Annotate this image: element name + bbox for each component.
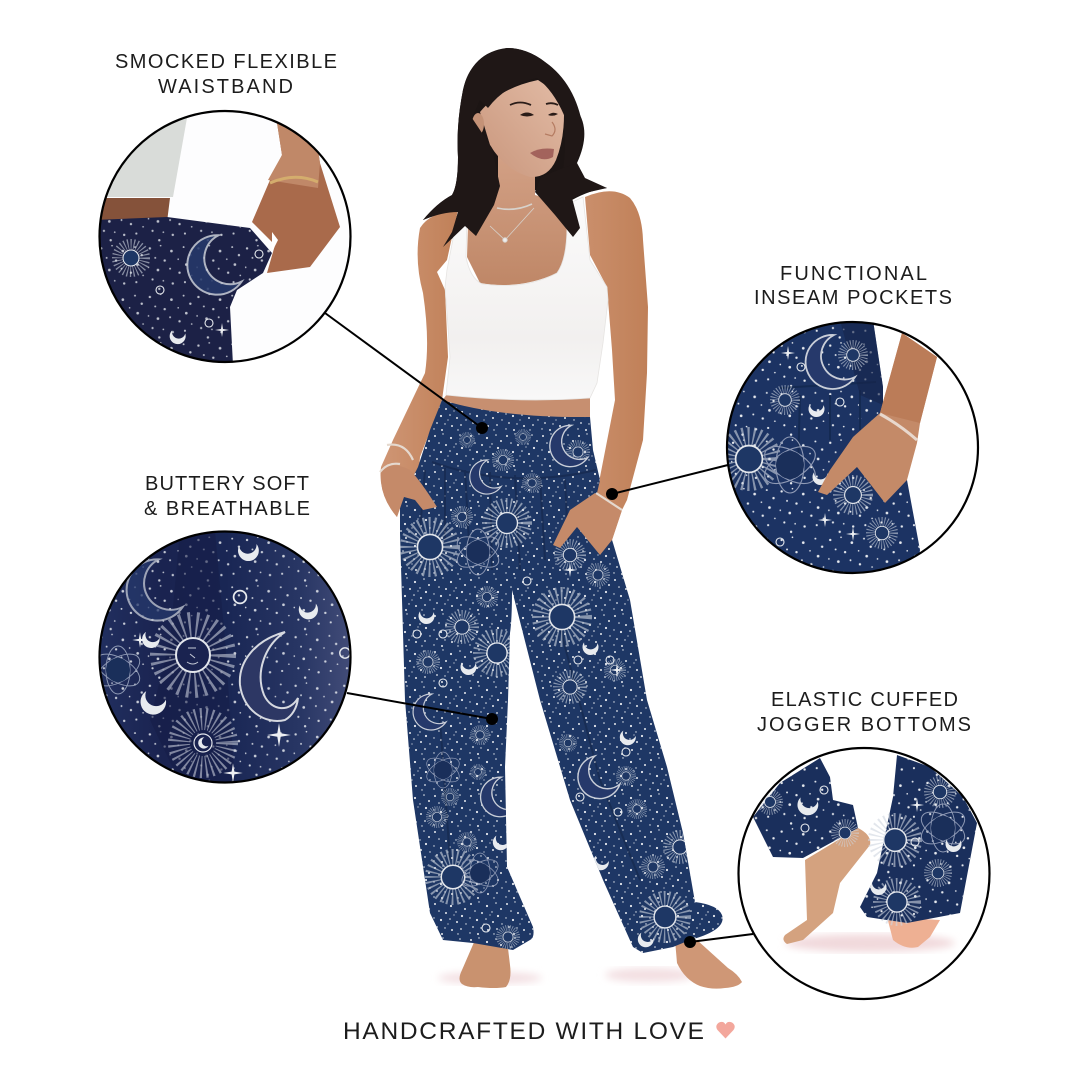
label: waistband <box>115 51 337 98</box>
white tank top <box>445 197 608 400</box>
inset: inseam pocket <box>728 323 937 572</box>
label: pockets <box>754 263 952 309</box>
connector: fabric <box>347 693 498 725</box>
left foot <box>460 940 510 988</box>
label: pockets: FUNCTIONAL <box>780 263 927 285</box>
label: waistband: WAISTBAND <box>158 76 293 98</box>
belly skin <box>102 198 170 220</box>
connector: cuffs <box>684 934 753 948</box>
left arm <box>381 210 458 522</box>
midriff <box>442 394 590 418</box>
harem pants <box>390 395 735 960</box>
inset ring: soft fabric <box>100 532 350 782</box>
ear and earring <box>472 113 488 148</box>
right foot <box>675 940 742 989</box>
hair right lock <box>535 163 607 237</box>
hair back layer <box>423 48 607 247</box>
connector: waistband <box>325 313 488 434</box>
label: fabric <box>144 473 310 520</box>
inset: waistband <box>100 118 340 361</box>
planted heel <box>887 917 940 948</box>
inset: elastic cuffs <box>753 755 977 954</box>
label: fabric: BUTTERY SOFT <box>145 473 309 495</box>
necklaces <box>490 204 534 242</box>
right hand <box>553 493 622 555</box>
label: pockets: INSEAM POCKETS <box>754 287 952 309</box>
dark drape <box>150 531 235 783</box>
right arm <box>553 191 648 555</box>
large crescent moon <box>240 632 298 721</box>
label: cuffs: ELASTIC CUFFED <box>771 689 958 711</box>
right cuff <box>860 755 977 923</box>
chest and neck <box>467 150 572 285</box>
inset: soft fabric <box>91 531 351 783</box>
arm and hand <box>818 333 937 503</box>
pants fabric <box>95 217 272 365</box>
inset ring: elastic cuffs <box>738 748 990 999</box>
sun motif <box>163 625 223 685</box>
small sun motif <box>179 719 227 767</box>
pants fabric <box>720 320 920 580</box>
left hand <box>381 465 437 517</box>
connector: pocket <box>606 465 728 500</box>
inset ring: waistband <box>100 111 350 362</box>
face <box>480 80 564 177</box>
sleeve <box>107 118 187 197</box>
label: cuffs: JOGGER BOTTOMS <box>757 714 971 736</box>
raised foot <box>783 828 870 944</box>
label: fabric: & BREATHABLE <box>144 498 310 520</box>
floor shadow <box>785 934 955 952</box>
label: waistband: SMOCKED FLEXIBLE <box>115 51 337 73</box>
bracelets <box>380 445 622 510</box>
label: cuffs <box>757 689 971 736</box>
model figure <box>380 48 742 989</box>
facial features <box>510 102 558 159</box>
hair left side with cap <box>423 48 584 247</box>
smocking folds <box>420 462 640 880</box>
hand with bracelet <box>252 110 340 273</box>
icon: heart <box>716 1022 735 1038</box>
inset ring: inseam pocket <box>727 322 978 573</box>
left cuff <box>753 758 858 858</box>
floor shadows under feet <box>438 968 695 984</box>
footer tagline: HANDCRAFTED WITH LOVE <box>343 1018 704 1045</box>
